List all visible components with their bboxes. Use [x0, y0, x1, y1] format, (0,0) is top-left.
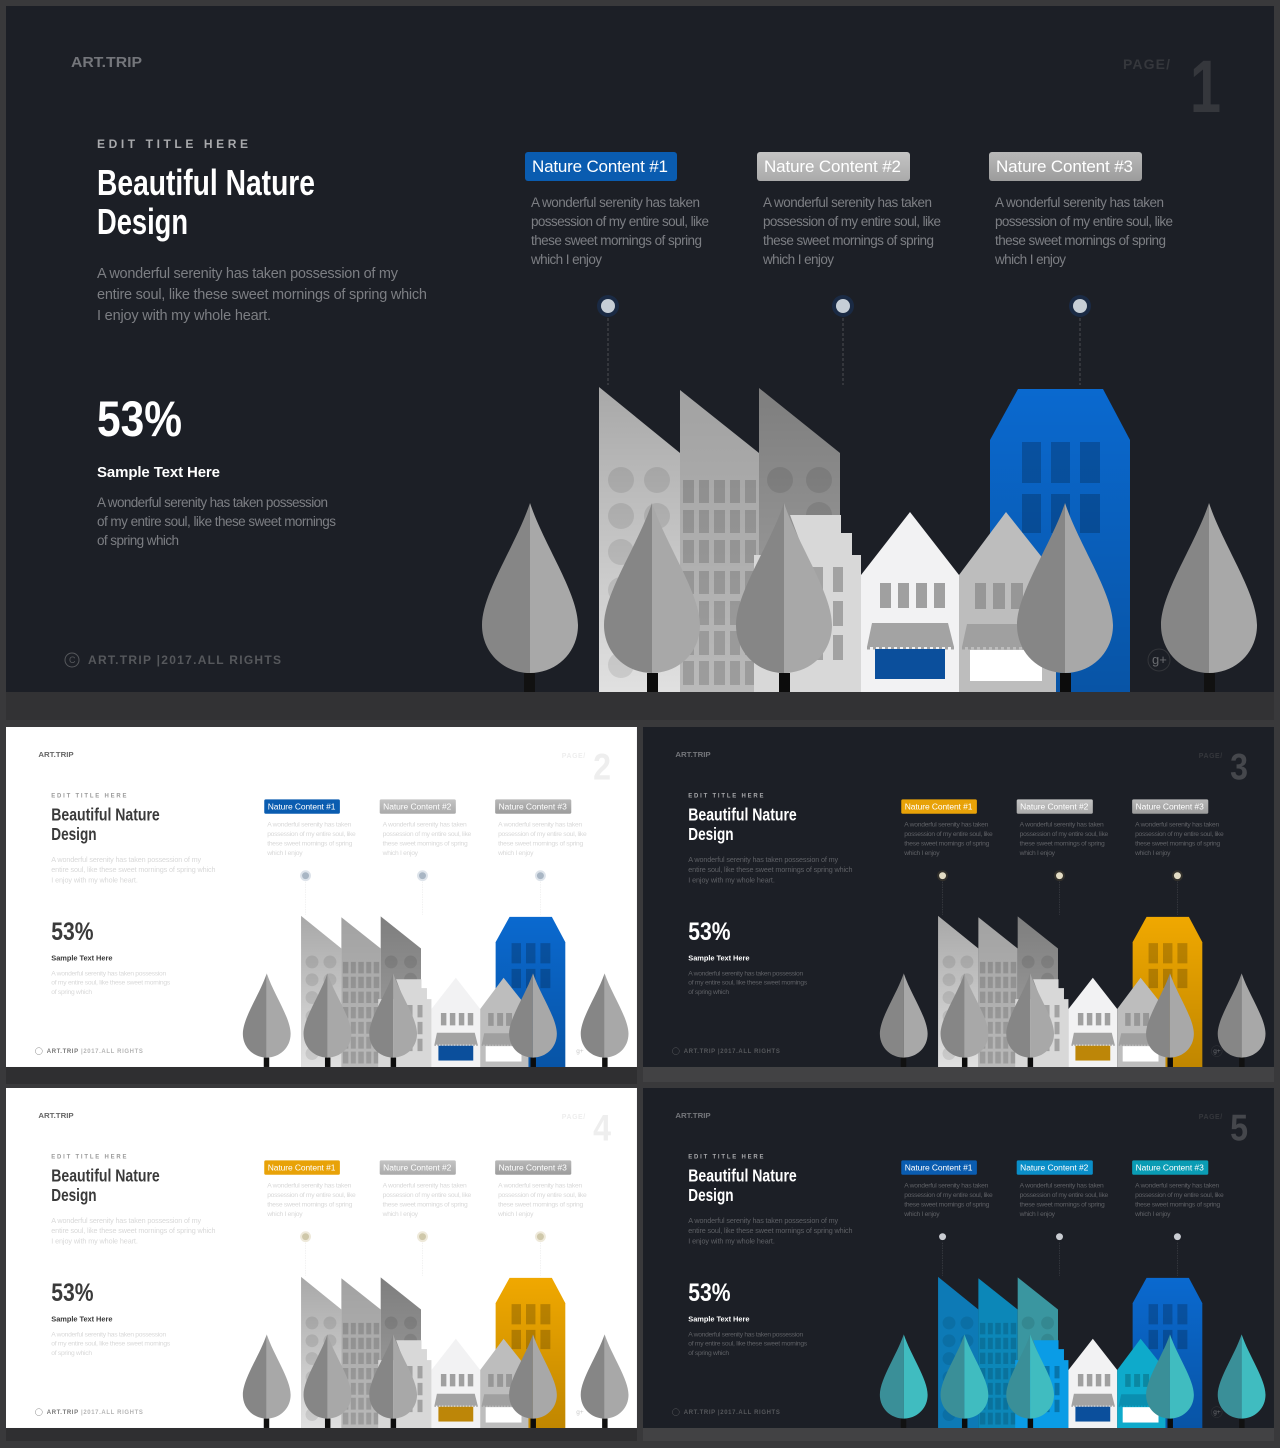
- footer copyright: ART.TRIP |2017.ALL RIGHTS: [684, 1410, 780, 1416]
- column text 2: [1019, 822, 1109, 857]
- column text 2: [762, 195, 941, 267]
- column text 2: which I enjoy: [382, 1211, 419, 1218]
- icon: google plus: g+: [1213, 1048, 1221, 1055]
- intro paragraph: I enjoy with my whole heart.: [97, 308, 271, 324]
- intro paragraph: [688, 1216, 852, 1246]
- slide background: [643, 1088, 1274, 1428]
- column text 2: possession of my entire soul, like: [383, 1192, 472, 1199]
- column text 3: which I enjoy: [1134, 1211, 1171, 1218]
- content tag 3: [495, 799, 571, 814]
- page indicator: 4: [593, 1108, 612, 1149]
- statistic 53%: 53%: [51, 919, 94, 946]
- page indicator: [562, 1108, 612, 1149]
- column text 3: these sweet mornings of spring: [1135, 1201, 1220, 1208]
- column text 3: [994, 195, 1173, 267]
- column text 3: which I enjoy: [1134, 850, 1171, 857]
- content tag 1: [525, 152, 677, 181]
- footer copyright: ART.TRIP |2017.ALL RIGHTS: [47, 1049, 143, 1055]
- sample heading: Sample Text Here: [97, 464, 220, 481]
- title: [97, 162, 315, 242]
- column text 1: A wonderful serenity has taken: [267, 1183, 352, 1190]
- column text 1: which I enjoy: [903, 850, 940, 857]
- sample paragraph: of spring which: [51, 1350, 92, 1357]
- column text 2: which I enjoy: [1019, 1211, 1056, 1218]
- column text 1: [530, 195, 709, 267]
- column text 3: A wonderful serenity has taken: [995, 195, 1164, 210]
- column text 3: possession of my entire soul, like: [498, 1192, 587, 1199]
- column text 3: which I enjoy: [497, 1211, 534, 1218]
- column text 1: possession of my entire soul, like: [904, 831, 993, 838]
- page indicator: PAGE/: [562, 1114, 585, 1121]
- marker dots and leader lines: [597, 295, 1091, 385]
- column text 2: these sweet mornings of spring: [383, 1201, 468, 1208]
- column text 2: these sweet mornings of spring: [383, 840, 468, 847]
- content tag 3: [989, 152, 1142, 181]
- statistic 53%: 53%: [688, 919, 731, 946]
- column text 3: possession of my entire soul, like: [1135, 1192, 1224, 1199]
- column text 3: [497, 1183, 587, 1218]
- statistic 53%: 53%: [97, 391, 182, 447]
- column text 2: which I enjoy: [382, 850, 419, 857]
- title: [51, 1166, 160, 1205]
- page indicator: [562, 747, 611, 788]
- content tag 1: Nature Content #1: [905, 801, 973, 811]
- column text 3: these sweet mornings of spring: [995, 233, 1166, 248]
- column text 1: [903, 1183, 993, 1218]
- marker dots and leader lines: [937, 1231, 1183, 1276]
- page indicator: 5: [1230, 1108, 1248, 1149]
- content tag 2: Nature Content #2: [764, 157, 901, 176]
- sample paragraph: [51, 1331, 171, 1357]
- intro paragraph: entire soul, like these sweet mornings of spring which: [97, 287, 427, 303]
- column text 1: [266, 1183, 356, 1218]
- page indicator: 2: [593, 747, 611, 788]
- column text 2: possession of my entire soul, like: [1020, 1192, 1109, 1199]
- content tag 2: [1017, 1160, 1093, 1175]
- column text 1: these sweet mornings of spring: [904, 1201, 990, 1208]
- brand label: ART.TRIP: [38, 750, 74, 759]
- sample heading: Sample Text Here: [51, 953, 112, 962]
- column text 1: A wonderful serenity has taken: [267, 822, 352, 829]
- column text 1: [266, 822, 356, 857]
- statistic 53%: 53%: [688, 1280, 731, 1307]
- column text 1: possession of my entire soul, like: [531, 214, 709, 229]
- content tag 1: Nature Content #1: [532, 157, 668, 176]
- page indicator: 1: [1190, 45, 1221, 128]
- sample paragraph: of my entire soul, like these sweet mornings: [688, 1341, 808, 1348]
- column text 3: possession of my entire soul, like: [995, 214, 1173, 229]
- town illustration: [482, 387, 1257, 692]
- brand label: ART.TRIP: [675, 750, 711, 759]
- content tag 3: Nature Content #3: [996, 157, 1133, 176]
- content tag 2: [380, 799, 456, 814]
- intro paragraph: [51, 1216, 215, 1246]
- slide background: [643, 727, 1274, 1067]
- content tag 3: Nature Content #3: [1136, 1162, 1204, 1172]
- column text 1: A wonderful serenity has taken: [904, 822, 989, 829]
- icon: google plus: g+: [576, 1048, 584, 1055]
- content tag 3: Nature Content #3: [499, 1162, 567, 1172]
- column text 1: these sweet mornings of spring: [904, 840, 990, 847]
- content tag 2: [380, 1160, 456, 1175]
- title: Design: [688, 824, 734, 844]
- content tag 1: [264, 799, 340, 814]
- column text 3: [497, 822, 587, 857]
- column text 2: these sweet mornings of spring: [763, 233, 934, 248]
- intro paragraph: A wonderful serenity has taken possession of my: [688, 855, 838, 864]
- sample paragraph: A wonderful serenity has taken possession: [688, 1331, 803, 1338]
- title: Design: [688, 1185, 734, 1205]
- column text 3: A wonderful serenity has taken: [1135, 822, 1219, 829]
- column text 3: [1134, 822, 1224, 857]
- sample paragraph: of spring which: [688, 1350, 729, 1357]
- sample paragraph: [51, 970, 171, 996]
- footer copyright: ART.TRIP |2017.ALL RIGHTS: [47, 1410, 143, 1416]
- column text 1: possession of my entire soul, like: [267, 831, 356, 838]
- page indicator: PAGE/: [1199, 1114, 1222, 1121]
- intro paragraph: I enjoy with my whole heart.: [688, 1237, 775, 1246]
- slide 2: white with blue accent: [6, 727, 637, 1067]
- town illustration: [243, 916, 628, 1067]
- page indicator: PAGE/: [1123, 56, 1170, 72]
- content tag 3: [1132, 1160, 1208, 1175]
- column text 3: these sweet mornings of spring: [498, 840, 583, 847]
- sample paragraph: A wonderful serenity has taken possession: [97, 495, 328, 510]
- eyebrow: EDIT TITLE HERE: [51, 1154, 126, 1160]
- content tag 2: [1017, 799, 1093, 814]
- sample paragraph: of my entire soul, like these sweet mornings: [51, 1341, 171, 1348]
- title: Design: [51, 824, 97, 844]
- sample paragraph: of my entire soul, like these sweet mornings: [51, 980, 171, 987]
- brand label: ART.TRIP: [675, 1111, 711, 1120]
- column text 3: A wonderful serenity has taken: [498, 1183, 582, 1190]
- page indicator: [1199, 1108, 1248, 1149]
- sample paragraph: [688, 1331, 808, 1357]
- icon: google plus: [1211, 1046, 1222, 1057]
- title: Beautiful Nature: [97, 162, 315, 203]
- column text 2: these sweet mornings of spring: [1020, 1201, 1105, 1208]
- sample heading: Sample Text Here: [688, 953, 749, 962]
- content tag 1: [901, 1160, 977, 1175]
- intro paragraph: A wonderful serenity has taken possession of my: [51, 855, 201, 864]
- intro paragraph: [51, 855, 215, 885]
- column text 2: A wonderful serenity has taken: [1020, 1183, 1104, 1190]
- slide 5: dark with teal and blue illustration: [643, 1088, 1274, 1428]
- content tag 1: [264, 1160, 340, 1175]
- slide 4: white with yellow accent: [6, 1088, 637, 1428]
- intro paragraph: A wonderful serenity has taken possession of my: [97, 266, 399, 282]
- column text 1: A wonderful serenity has taken: [904, 1183, 989, 1190]
- sample paragraph: of my entire soul, like these sweet mornings: [688, 980, 808, 987]
- column text 2: A wonderful serenity has taken: [383, 1183, 467, 1190]
- column text 2: [382, 1183, 472, 1218]
- town illustration: [880, 916, 1265, 1067]
- column text 2: A wonderful serenity has taken: [763, 195, 932, 210]
- column text 2: [1019, 1183, 1109, 1218]
- town illustration: [243, 1277, 628, 1428]
- intro paragraph: I enjoy with my whole heart.: [51, 876, 138, 885]
- brand label: ART.TRIP: [71, 54, 142, 71]
- content tag 1: Nature Content #1: [905, 1162, 973, 1172]
- column text 1: which I enjoy: [530, 252, 602, 267]
- title: Beautiful Nature: [688, 805, 797, 825]
- column text 3: A wonderful serenity has taken: [498, 822, 582, 829]
- title: [51, 805, 160, 844]
- sample paragraph: of spring which: [688, 989, 729, 996]
- column text 1: these sweet mornings of spring: [267, 840, 353, 847]
- title: [688, 1166, 797, 1205]
- content tag 3: Nature Content #3: [499, 801, 567, 811]
- footer copyright: C: [69, 655, 76, 665]
- sample paragraph: of spring which: [51, 989, 92, 996]
- column text 3: possession of my entire soul, like: [1135, 831, 1224, 838]
- icon: google plus: [1211, 1407, 1222, 1418]
- slide 1: dark blue main slide: [6, 6, 1274, 692]
- column text 2: A wonderful serenity has taken: [1020, 822, 1104, 829]
- intro paragraph: I enjoy with my whole heart.: [688, 876, 775, 885]
- brand label: ART.TRIP: [38, 1111, 74, 1120]
- sample paragraph: [97, 495, 336, 548]
- intro paragraph: entire soul, like these sweet mornings of spring which: [51, 1226, 215, 1235]
- sample paragraph: A wonderful serenity has taken possession: [688, 970, 803, 977]
- column text 2: possession of my entire soul, like: [383, 831, 472, 838]
- column text 1: which I enjoy: [266, 1211, 303, 1218]
- title: Beautiful Nature: [688, 1166, 797, 1186]
- column text 1: [903, 822, 993, 857]
- page indicator: [1199, 747, 1248, 788]
- sample paragraph: [688, 970, 808, 996]
- column text 2: these sweet mornings of spring: [1020, 840, 1105, 847]
- page indicator: PAGE/: [1199, 753, 1222, 760]
- column text 2: which I enjoy: [762, 252, 834, 267]
- slide background: [6, 1088, 637, 1428]
- title: Beautiful Nature: [51, 1166, 160, 1186]
- column text 2: [382, 822, 472, 857]
- sample paragraph: of my entire soul, like these sweet mornings: [97, 514, 336, 529]
- content tag 3: Nature Content #3: [1136, 801, 1204, 811]
- column text 3: these sweet mornings of spring: [498, 1201, 583, 1208]
- slide 3: dark with yellow accent: [643, 727, 1274, 1067]
- icon: google plus: g+: [1213, 1409, 1221, 1416]
- slide background: [6, 727, 637, 1067]
- intro paragraph: A wonderful serenity has taken possession of my: [688, 1216, 838, 1225]
- footer copyright: ART.TRIP |2017.ALL RIGHTS: [88, 653, 281, 667]
- marker dots and leader lines: [300, 1231, 546, 1276]
- sample heading: Sample Text Here: [688, 1314, 749, 1323]
- content tag 3: [495, 1160, 571, 1175]
- slide background: [6, 6, 1274, 692]
- sample heading: Sample Text Here: [51, 1314, 112, 1323]
- content tag 2: [757, 152, 910, 181]
- town illustration: [880, 1277, 1265, 1428]
- content tag 2: Nature Content #2: [383, 801, 452, 811]
- column text 3: these sweet mornings of spring: [1135, 840, 1220, 847]
- column text 1: these sweet mornings of spring: [267, 1201, 353, 1208]
- column text 3: which I enjoy: [994, 252, 1066, 267]
- column text 2: possession of my entire soul, like: [1020, 831, 1109, 838]
- column text 2: which I enjoy: [1019, 850, 1056, 857]
- column text 3: A wonderful serenity has taken: [1135, 1183, 1219, 1190]
- intro paragraph: I enjoy with my whole heart.: [51, 1237, 138, 1246]
- icon: google plus: g+: [1152, 652, 1167, 667]
- eyebrow: EDIT TITLE HERE: [688, 1154, 763, 1160]
- column text 2: possession of my entire soul, like: [763, 214, 941, 229]
- column text 2: A wonderful serenity has taken: [383, 822, 467, 829]
- footer copyright: ART.TRIP |2017.ALL RIGHTS: [684, 1049, 780, 1055]
- statistic 53%: 53%: [51, 1280, 94, 1307]
- icon: google plus: [1148, 649, 1170, 671]
- intro paragraph: entire soul, like these sweet mornings of spring which: [51, 865, 215, 874]
- content tag 1: [901, 799, 977, 814]
- intro paragraph: entire soul, like these sweet mornings of spring which: [688, 865, 852, 874]
- marker dots and leader lines: [300, 870, 546, 915]
- column text 1: possession of my entire soul, like: [267, 1192, 356, 1199]
- icon: google plus: g+: [576, 1409, 584, 1416]
- content tag 2: Nature Content #2: [1020, 801, 1089, 811]
- page indicator: 3: [1230, 747, 1248, 788]
- icon: google plus: [574, 1407, 585, 1418]
- intro paragraph: entire soul, like these sweet mornings of spring which: [688, 1226, 852, 1235]
- column text 1: possession of my entire soul, like: [904, 1192, 993, 1199]
- content tag 3: [1132, 799, 1208, 814]
- content tag 2: Nature Content #2: [383, 1162, 452, 1172]
- column text 1: which I enjoy: [266, 850, 303, 857]
- title: Design: [97, 201, 188, 242]
- column text 3: [1134, 1183, 1224, 1218]
- title: [688, 805, 797, 844]
- sample paragraph: of spring which: [97, 533, 179, 548]
- marker dots and leader lines: [937, 870, 1183, 915]
- column text 1: these sweet mornings of spring: [531, 233, 702, 248]
- intro paragraph: [97, 266, 427, 324]
- title: Beautiful Nature: [51, 805, 160, 825]
- column text 3: which I enjoy: [497, 850, 534, 857]
- icon: google plus: [574, 1046, 585, 1057]
- content tag 2: Nature Content #2: [1020, 1162, 1089, 1172]
- content tag 1: Nature Content #1: [268, 801, 336, 811]
- column text 1: A wonderful serenity has taken: [531, 195, 700, 210]
- intro paragraph: A wonderful serenity has taken possession of my: [51, 1216, 201, 1225]
- eyebrow: EDIT TITLE HERE: [51, 793, 126, 799]
- page indicator: [1123, 45, 1221, 128]
- title: Design: [51, 1185, 97, 1205]
- eyebrow: EDIT TITLE HERE: [97, 137, 248, 151]
- eyebrow: EDIT TITLE HERE: [688, 793, 763, 799]
- intro paragraph: [688, 855, 852, 885]
- sample paragraph: A wonderful serenity has taken possession: [51, 970, 166, 977]
- column text 1: which I enjoy: [903, 1211, 940, 1218]
- sample paragraph: A wonderful serenity has taken possession: [51, 1331, 166, 1338]
- page indicator: PAGE/: [562, 753, 585, 760]
- content tag 1: Nature Content #1: [268, 1162, 336, 1172]
- column text 3: possession of my entire soul, like: [498, 831, 587, 838]
